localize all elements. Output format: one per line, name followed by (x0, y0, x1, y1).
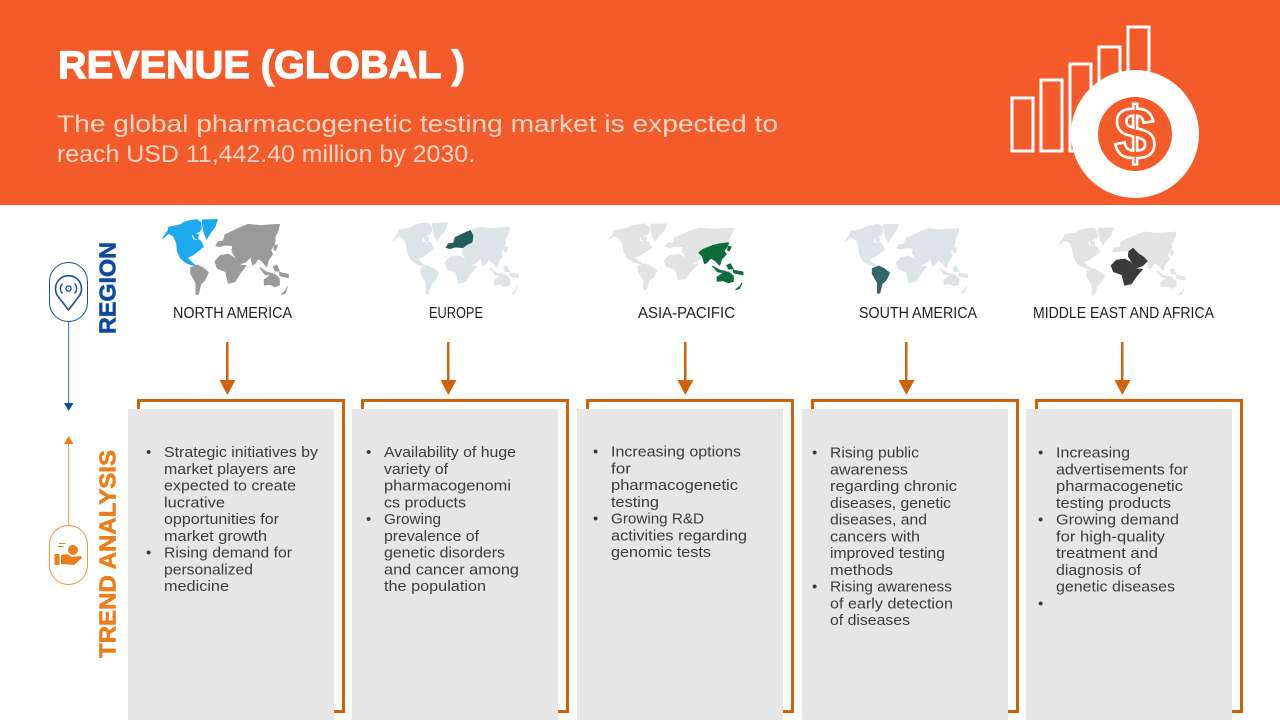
panel: Europe trends: the population (384, 578, 486, 595)
panel: Europe trends: and cancer among (384, 561, 519, 578)
region labels (173, 305, 1215, 322)
panel: Middle East and Africa trends: pharmacogenetic (1056, 478, 1184, 495)
title: REVENUE (GLOBAL ) (58, 44, 465, 87)
icon: location pin with arrow down (50, 262, 88, 411)
panel: Middle East and Africa trends: for high-quality (1056, 528, 1166, 545)
panel: North America trends: Strategic initiatives by (164, 444, 319, 461)
panel: South America trends: cancers with (830, 528, 920, 545)
panel: Asia-Pacific trends: testing (611, 494, 659, 511)
icon: revenue bars and dollar coin (1012, 27, 1199, 198)
region labels: EUROPE (429, 305, 483, 322)
panel: North America trends: personalized (164, 561, 253, 578)
map: Europe (393, 223, 519, 294)
subtitle: The global pharmacogenetic testing market is expected to (57, 111, 778, 138)
panel: North America trends: opportunities for (164, 511, 279, 528)
panel: North America trends (128, 400, 344, 720)
panel: Middle East and Africa trends: genetic diseases (1056, 578, 1175, 596)
panel: Middle East and Africa trends: treatment and (1056, 545, 1158, 562)
map: Middle East and Africa (1059, 228, 1185, 295)
panel: South America trends: methods (830, 562, 893, 579)
icon: hand with coin and arrow up (50, 436, 88, 584)
region labels: SOUTH AMERICA (859, 305, 978, 322)
map: North America (163, 220, 288, 294)
panel: Europe trends: Growing (384, 511, 441, 528)
panel: South America trends: diseases, and (830, 512, 927, 528)
panel: North America trends: market players are (164, 461, 296, 478)
panel: South America trends: diseases, genetic (830, 495, 952, 512)
region labels: MIDDLE EAST AND AFRICA (1033, 305, 1215, 322)
panel: Asia-Pacific trends: genomic tests (611, 544, 711, 561)
region labels: ASIA-PACIFIC (638, 305, 735, 322)
panel: North America trends: market growth (164, 528, 267, 545)
panel: Europe trends: prevalence of (384, 528, 480, 545)
panel: South America trends: • (812, 578, 817, 596)
icon: revenue bars and dollar coin: $ (1114, 92, 1156, 175)
panel: Middle East and Africa trends: • (1038, 595, 1043, 612)
sidebar label: region: REGION (94, 242, 120, 334)
region labels: NORTH AMERICA (173, 305, 293, 322)
panel: South America trends: regarding chronic (830, 478, 958, 495)
panel: South America trends: of early detection (830, 595, 953, 612)
panel: North America trends: lucrative (164, 494, 225, 511)
panel: South America trends: Rising awareness (830, 578, 952, 596)
panel: Asia-Pacific trends: activities regarding (611, 527, 747, 544)
panel: South America trends: awareness (830, 461, 908, 478)
panel: Europe trends: • (366, 511, 371, 528)
panel: Asia-Pacific trends: • (593, 510, 598, 528)
panel: North America trends: medicine (164, 578, 229, 595)
panel: South America trends: • (812, 444, 817, 462)
panel: North America trends: • (146, 444, 151, 461)
map: South America (845, 224, 968, 293)
panel: Asia-Pacific trends: • (593, 444, 598, 460)
panel: Europe trends: cs products (384, 494, 466, 511)
panel: Middle East and Africa trends: diagnosis of (1056, 562, 1142, 579)
header band (0, 0, 1280, 205)
panel: Europe trends: pharmacogenomi (384, 478, 511, 494)
panel: Europe trends: variety of (384, 461, 449, 478)
sidebar label: trend analysis: TREND ANALYSIS (94, 450, 120, 658)
panel: Asia-Pacific trends: Growing R&D (611, 510, 704, 528)
panel: Asia-Pacific trends: pharmacogenetic (611, 477, 739, 494)
panel: South America trends: of diseases (830, 612, 910, 629)
subtitle (57, 111, 778, 168)
panel: North America trends: Rising demand for (164, 544, 292, 562)
panel: Middle East and Africa trends: • (1038, 512, 1043, 528)
panel: Asia-Pacific trends (577, 400, 792, 720)
panel: Middle East and Africa trends: Growing demand (1056, 512, 1179, 528)
subtitle: reach USD 11,442.40 million by 2030. (57, 141, 475, 168)
panel: Asia-Pacific trends: Increasing options (611, 444, 741, 460)
panel: Asia-Pacific trends: for (611, 460, 631, 477)
panel: Middle East and Africa trends: Increasing (1056, 444, 1130, 462)
panel: Europe trends: Availability of huge (384, 444, 516, 461)
panel: South America trends: Rising public (830, 444, 920, 462)
panel: Middle East and Africa trends (1026, 400, 1242, 720)
panel: Middle East and Africa trends: advertisements for (1056, 461, 1188, 478)
panel: North America trends: expected to create (164, 478, 296, 494)
panel: Europe trends (352, 400, 568, 720)
panel: Middle East and Africa trends: • (1038, 444, 1043, 462)
panel: North America trends: • (146, 544, 151, 562)
panel: South America trends (802, 400, 1018, 720)
panel: Middle East and Africa trends: testing products (1056, 495, 1171, 512)
panel: Europe trends: • (366, 444, 371, 461)
map: Asia-Pacific (608, 224, 743, 290)
arrows from regions to panels (220, 342, 1130, 395)
panel: South America trends: improved testing (830, 545, 945, 562)
panel: Europe trends: genetic disorders (384, 544, 505, 562)
